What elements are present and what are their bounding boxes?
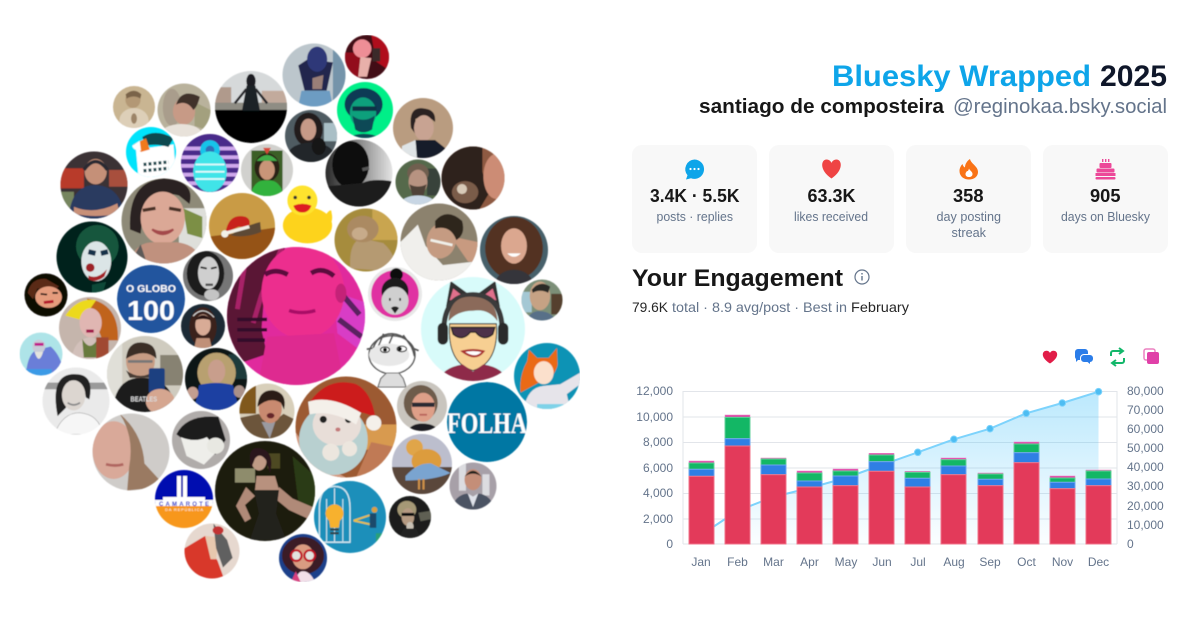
avatar: smiling woman [122,178,206,264]
stat card: days on Bluesky: days on Bluesky [1061,210,1151,224]
stat card: day posting streak: 358 [953,186,984,206]
bar: January [689,461,714,544]
avatar: black and white woman [183,251,233,301]
month labels: Feb [727,555,748,569]
month labels: Aug [943,555,965,569]
stat card: posts and replies: 3.4K · 5.5K [650,186,740,206]
icon: quotes legend [1144,349,1159,364]
chart legend icons [1043,348,1159,366]
cumulative line [701,388,1102,535]
avatar: cartoon wizard [20,332,62,376]
avatar: woman on pillow [157,83,212,137]
stat card: day posting streak: day posting [936,210,1001,224]
icon: replies legend [1075,349,1093,364]
avatar: woman in black dress [215,441,315,541]
title: Bluesky Wrapped [832,60,1091,93]
bar: May [833,469,858,544]
stacked bar and line chart [636,384,1164,569]
stat card: day posting streak [906,145,1031,253]
month labels: Sep [979,555,1001,569]
engagement summary [632,299,909,315]
avatar: cougar [334,208,398,272]
avatar: chick in blue dress [392,434,452,494]
right axis labels: 20,000 [1127,499,1164,513]
icon: heart [822,160,841,178]
avatar: black and white cat [172,411,230,469]
avatar: silhouette on balcony [215,71,287,146]
avatar: dog in Santa hat [209,193,275,259]
left axis labels: 0 [666,537,673,551]
avatar: illustrated woman in red dress [184,524,240,578]
avatar: woman with sunglasses [389,496,431,538]
avatar: O Globo 100 logo: O GLOBO [126,283,176,295]
month labels: Nov [1052,555,1073,569]
month labels: Jun [872,555,892,569]
left axis labels: 4,000 [643,486,673,500]
bar: December [1086,470,1111,544]
bar: June [869,453,894,544]
right axis labels: 40,000 [1127,460,1164,474]
avatar: cartoon man with cat ears and headphones [421,277,525,381]
avatar: woman with cat [285,110,337,168]
title: 2025 [1100,60,1167,93]
icon: birthday cake [1096,159,1116,180]
left axis labels: 2,000 [643,512,673,526]
bar: September [978,473,1003,544]
avatar: hamster in Santa hat [296,376,396,478]
right axis labels: 70,000 [1127,403,1164,417]
right axis labels [1127,384,1164,551]
avatar: black and white man in profile [326,140,392,206]
month labels: Dec [1088,555,1109,569]
avatar: cartoon falcon [126,127,176,177]
bar: August [941,458,966,544]
icon: reposts legend [1111,348,1124,366]
bar: October [1014,442,1039,544]
stat card: likes received [769,145,894,253]
month labels: Jul [910,555,926,569]
month labels: Jan [691,555,711,569]
avatar: woman on tan wall [393,98,453,158]
left axis labels: 8,000 [643,435,673,449]
month labels: Mar [763,555,784,569]
stat card: posts and replies: posts · replies [656,210,733,224]
avatar: glitch cyan figure [181,134,239,192]
avatar: rubber duck [283,186,332,243]
avatar: Folha logo [447,382,527,462]
stat card: likes received: 63.3K [808,186,856,206]
right axis labels: 50,000 [1127,441,1164,455]
heading: Your Engagement: Your Engagement [632,265,843,292]
engagement summary: 79.6K [632,299,669,315]
icon: speech bubble [685,160,704,180]
right axis labels: 0 [1127,537,1134,551]
avatar: large magenta portrait [227,245,365,385]
stat card: posts and replies [632,145,757,253]
avatar: woman with glasses [397,381,447,431]
avatar: hooded figure [282,44,349,106]
avatar: anime girl with orange hair [514,343,580,411]
bar: March [761,458,786,544]
avatar: Camarote da Republica logo: CAMAROTE [159,502,209,508]
avatar: sepia baby [113,86,155,133]
bar: February [725,415,750,544]
avatar: joker [56,222,128,292]
icon: info [855,270,869,284]
avatar: red toy [345,35,389,79]
avatar: woman half-face with long hair [92,414,170,490]
avatar: curly-haired woman [479,215,549,285]
avatar: man in suit [450,462,496,510]
right axis labels: 30,000 [1127,479,1164,493]
month labels [691,555,1109,569]
chart grid [683,391,1117,544]
stat card: day posting streak: streak [952,226,987,240]
month labels: Apr [800,555,819,569]
display name and handle: @reginokaa.bsky.social [953,96,1167,118]
avatar: sketch boy [367,334,419,387]
avatar: shouting man [240,384,294,438]
display name and handle [699,96,1167,118]
left axis labels [636,384,673,551]
bar: April [797,471,822,544]
right axis labels: 10,000 [1127,518,1164,532]
bar: November [1050,476,1075,544]
stat card: days on Bluesky [1043,145,1168,253]
avatar: green duotone man [337,82,393,138]
avatar: O Globo 100 logo: 100 [127,295,175,326]
avatar: Camarote da Republica logo: DA REPÚBLICA [165,507,203,512]
icon: likes legend [1043,351,1057,364]
avatar: pink cartoon with bun [368,267,422,321]
right axis labels: 80,000 [1127,384,1164,398]
avatar: Folha logo: FOLHA [447,407,527,440]
avatar: colorful 80s singer [59,297,121,359]
avatar: man on green background [522,280,564,320]
right axis labels: 60,000 [1127,422,1164,436]
avatar bubble collage [20,35,580,582]
cumulative area [701,392,1098,544]
avatar: young woman with fringe [181,304,225,348]
avatar: O Globo 100 logo [117,265,185,333]
stat card: likes received: likes received [794,210,868,224]
engagement summary: total · 8.9 avg/post · Best in [672,299,847,315]
avatar: lightbulb in a cage [314,481,386,553]
avatar: Camarote da Republica logo [155,470,213,530]
month labels: May [835,555,857,569]
stat card: days on Bluesky: 905 [1090,186,1120,206]
avatar: cartoon woman with red glasses [279,534,327,582]
avatar: man taking mirror selfie [107,336,183,414]
left axis labels: 10,000 [636,410,673,424]
engagement summary: February [851,299,909,315]
avatar: man lying in white shirt [400,204,478,280]
month labels: Oct [1017,555,1036,569]
avatar: green Christmas woman [241,144,293,196]
avatar: comic woman [24,274,68,316]
left axis labels: 6,000 [643,461,673,475]
avatar: bearded man [394,158,442,205]
avatar: grayscale smiling woman [42,368,110,434]
left axis labels: 12,000 [636,384,673,398]
avatar: woman with dark cat [442,146,510,210]
bar: July [905,471,930,544]
display name and handle: santiago de composteira [699,96,945,118]
avatar: coach with headset [60,152,128,218]
icon: flame [960,159,978,180]
avatar: woman in blue shirt [185,348,247,410]
